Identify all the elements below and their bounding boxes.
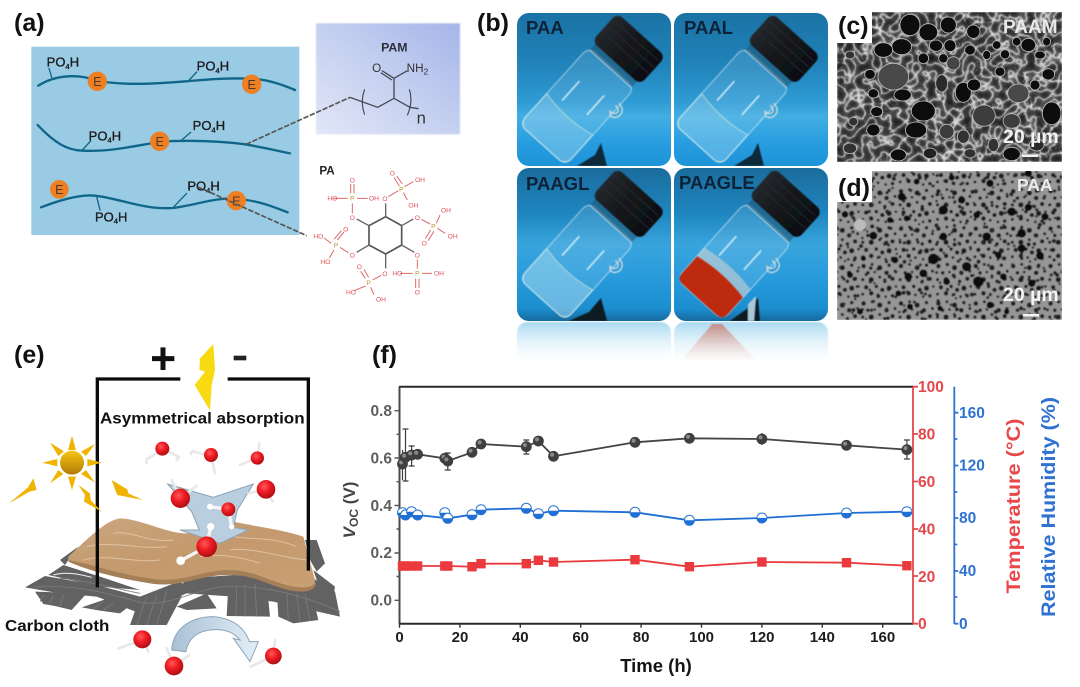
- bottom axis ticks and labels: 100: [689, 629, 714, 646]
- label PAA: PAA: [1017, 175, 1053, 195]
- E ions: E: [55, 183, 64, 197]
- phosphate group labels: PO: [47, 55, 65, 70]
- sun icon: [9, 436, 143, 512]
- PA structure: OH: [415, 177, 425, 184]
- temperature axis: 0: [918, 616, 927, 633]
- reflection under bottom tiles: [517, 322, 828, 362]
- PA structure: HO: [327, 196, 337, 203]
- scale bar 20 µm (d): 20 µm: [1003, 284, 1059, 306]
- humidity axis: 120: [959, 458, 985, 474]
- bottom axis ticks and labels: 80: [633, 629, 649, 646]
- temperature axis: [913, 379, 944, 633]
- humidity axis: 40: [959, 563, 976, 580]
- PA structure: OH: [441, 208, 451, 215]
- PA structure: P: [334, 242, 339, 249]
- left axis ticks and labels: [370, 403, 400, 610]
- PAM structure box: [316, 23, 460, 134]
- PA structure: OH: [369, 196, 379, 203]
- PA structure: O: [415, 252, 420, 259]
- phosphate group labels: 4: [206, 186, 211, 195]
- plus sign: [152, 347, 174, 370]
- series: temperature: [398, 555, 912, 571]
- PA structure: P: [366, 280, 371, 287]
- panel label (f): (f): [372, 341, 397, 369]
- panel e: device schematic: [5, 344, 340, 675]
- carbon cloth: [25, 540, 340, 625]
- E ions: E: [155, 135, 164, 149]
- bright spot: [854, 219, 866, 231]
- panel a: polymer network schematic: [31, 23, 460, 303]
- PA structure: O: [415, 215, 420, 222]
- phosphate group labels: 4: [215, 66, 220, 75]
- PA structure: O: [357, 264, 362, 271]
- PA structure: OH: [376, 296, 386, 303]
- PAM structure box: NH: [407, 62, 424, 75]
- tile: PAAL vial: PAAL: [684, 17, 733, 38]
- tile: PAAGL vial: PAAGL: [526, 173, 589, 194]
- series: relative humidity: [398, 503, 912, 525]
- PA structure: O: [422, 240, 427, 247]
- carbon cloth label: Carbon cloth: [5, 618, 109, 635]
- phosphate group labels: H: [118, 209, 127, 224]
- phosphate group labels: 4: [107, 136, 112, 145]
- PA structure: O: [382, 271, 388, 278]
- left axis title: (V): [340, 482, 359, 509]
- series: open circuit voltage: [397, 429, 912, 481]
- phosphate group labels: PO: [89, 128, 107, 143]
- PA structure: O: [390, 170, 395, 177]
- panel label (e): (e): [14, 341, 45, 369]
- PA structure: [313, 164, 458, 303]
- tile: PAA vial: [517, 13, 671, 170]
- PA structure: PA: [319, 164, 335, 177]
- phosphate group labels: PO: [187, 179, 206, 194]
- PA structure: P: [431, 223, 436, 230]
- left axis title: V: [340, 525, 359, 538]
- phosphate group labels: PO: [95, 209, 114, 224]
- temperature axis: 100: [918, 379, 944, 396]
- plot frame: [399, 387, 913, 624]
- PAM structure box: 2: [424, 66, 429, 76]
- PA structure: HO: [346, 289, 356, 296]
- tile: PAAGLE vial with red liquid: [674, 168, 828, 325]
- panel label (a): (a): [14, 9, 45, 37]
- phosphate group labels: H: [70, 55, 79, 70]
- scale bar 20 µm (d): [1003, 284, 1059, 316]
- asymmetrical absorption label: Asymmetrical absorption: [100, 410, 305, 427]
- panel b: vial photographs: [517, 13, 828, 362]
- lightning bolt: [195, 344, 215, 411]
- humidity axis: 80: [959, 510, 976, 527]
- panel label (c): (c): [838, 12, 869, 40]
- PA structure: HO: [320, 259, 330, 266]
- bottom axis ticks and labels: 60: [572, 629, 589, 646]
- phosphate group labels: PO: [193, 118, 211, 133]
- large pores: [843, 14, 1061, 161]
- PA structure: O: [350, 177, 355, 184]
- bottom axis ticks and labels: 120: [749, 629, 775, 646]
- phosphate group labels: PO: [197, 59, 215, 74]
- bottom axis ticks and labels: [395, 624, 895, 646]
- left axis ticks and labels: 0.0: [370, 592, 392, 610]
- phosphate group labels: H: [210, 179, 220, 194]
- tile: PAAL vial: [673, 13, 828, 170]
- scale bar 20 µm (c): 20 µm: [1003, 126, 1059, 148]
- dashed connector to PAM: [246, 97, 350, 144]
- left axis ticks and labels: 0.4: [370, 498, 392, 515]
- E ions: E: [247, 78, 256, 92]
- PA structure: HO: [392, 271, 402, 278]
- PA structure: OH: [408, 202, 419, 209]
- PAM structure box: PAM: [381, 41, 408, 55]
- temperature axis: 20: [918, 569, 935, 586]
- panel f: stability chart: [340, 379, 1060, 676]
- PAM structure box: O: [372, 62, 381, 75]
- PA structure: O: [350, 215, 355, 222]
- PA structure: HO: [313, 233, 323, 240]
- water molecules: [118, 442, 282, 675]
- bottom axis ticks and labels: 0: [395, 629, 404, 646]
- bottom axis ticks and labels: 140: [810, 629, 835, 646]
- temperature axis: 60: [918, 474, 935, 491]
- phosphate group labels: H: [220, 59, 229, 74]
- hydrogel membrane: [68, 518, 316, 592]
- humidity axis: 0: [959, 616, 968, 633]
- humidity axis: 160: [959, 405, 985, 422]
- left axis ticks and labels: 0.6: [370, 450, 392, 468]
- phosphate group labels: [47, 55, 229, 226]
- E ions: E: [232, 194, 241, 208]
- dashed connector to PA: [197, 187, 307, 236]
- PA structure: OH: [434, 271, 444, 278]
- panel c: PAAM SEM image: [837, 12, 1062, 162]
- panel d: PAA SEM image: [837, 170, 1062, 320]
- absorption wedge arrow: [168, 484, 253, 543]
- large pores: [842, 170, 1049, 315]
- blue network background: [31, 47, 299, 235]
- polymer chains: [38, 68, 295, 212]
- label PAAM: PAAM: [1003, 17, 1058, 38]
- PA structure: O: [343, 227, 348, 234]
- phosphate group labels: H: [216, 118, 225, 133]
- PA structure: O: [350, 252, 355, 259]
- tile: PAA vial: PAA: [526, 17, 564, 38]
- bottom axis title: Time (h): [620, 655, 692, 676]
- PA structure: P: [399, 186, 404, 193]
- left axis title: OC: [347, 509, 361, 527]
- panel label (d): (d): [838, 174, 870, 202]
- circuit wires: [97, 379, 308, 587]
- temperature axis: 40: [918, 522, 935, 538]
- bottom axis ticks and labels: 160: [870, 629, 895, 646]
- humidity axis title: Relative Humidity (%): [1039, 397, 1060, 617]
- PAM structure box: n: [417, 109, 426, 128]
- bottom axis ticks and labels: 40: [512, 629, 529, 646]
- E ions: E: [93, 75, 102, 89]
- PA structure: O: [382, 196, 388, 203]
- bottom axis ticks and labels: 20: [452, 629, 468, 646]
- curved transport arrow: [172, 617, 258, 662]
- PA structure: P: [350, 196, 355, 203]
- left axis ticks and labels: 0.8: [370, 403, 392, 420]
- PA structure: OH: [448, 233, 458, 240]
- panel label (b): (b): [477, 9, 509, 37]
- tile: PAAGL vial: [517, 168, 671, 325]
- E ions: [50, 72, 261, 210]
- minus sign: [234, 356, 246, 360]
- phosphate group labels: 4: [211, 125, 216, 134]
- phosphate group labels: 4: [114, 217, 119, 226]
- temperature axis: 80: [918, 426, 935, 444]
- temperature axis title: Temperature (°C): [1004, 418, 1025, 594]
- tile: PAAGLE vial with red liquid: PAAGLE: [679, 172, 755, 193]
- PA structure: O: [415, 290, 420, 297]
- humidity axis: [954, 387, 985, 633]
- PA structure: P: [415, 271, 420, 278]
- phosphate group labels: H: [112, 128, 121, 143]
- phosphate group labels: 4: [65, 62, 70, 71]
- left axis ticks and labels: 0.2: [370, 545, 392, 562]
